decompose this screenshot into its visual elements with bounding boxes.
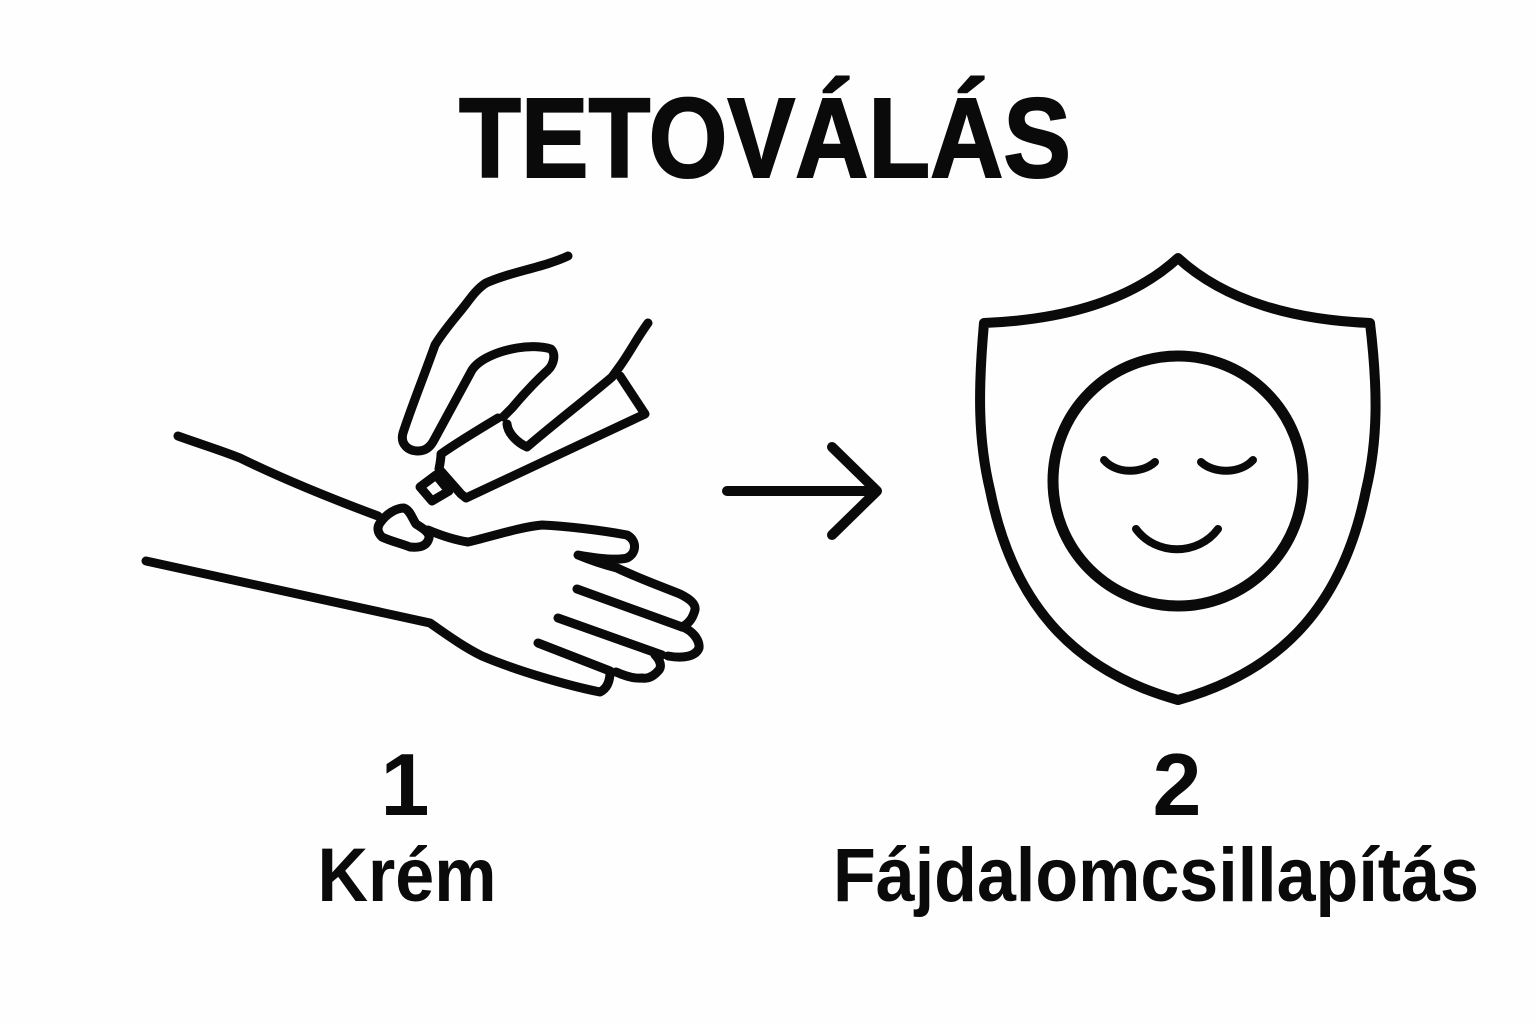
- step 2 number: 2: [1153, 735, 1201, 834]
- hand behind cream tube: [507, 323, 648, 447]
- icon: shield with calm face: [980, 258, 1376, 700]
- cream tube: [439, 376, 645, 498]
- tube cap: [420, 475, 449, 501]
- step 1 number: 1: [381, 735, 429, 834]
- shield: [980, 258, 1376, 700]
- icon: hands applying cream: [146, 256, 699, 692]
- finger lines: [538, 589, 682, 671]
- upper hand: [402, 256, 568, 451]
- eyes and smile: [1104, 460, 1253, 549]
- arrow: [727, 447, 877, 535]
- cream blob: [378, 508, 429, 547]
- step 2 label: Fájdalomcsillapítás: [833, 833, 1479, 918]
- face outline: [1053, 356, 1303, 606]
- step 1 label: Krém: [318, 833, 496, 918]
- title: TETOVÁLÁS: [459, 75, 1071, 201]
- lower arm and hand: [146, 436, 699, 692]
